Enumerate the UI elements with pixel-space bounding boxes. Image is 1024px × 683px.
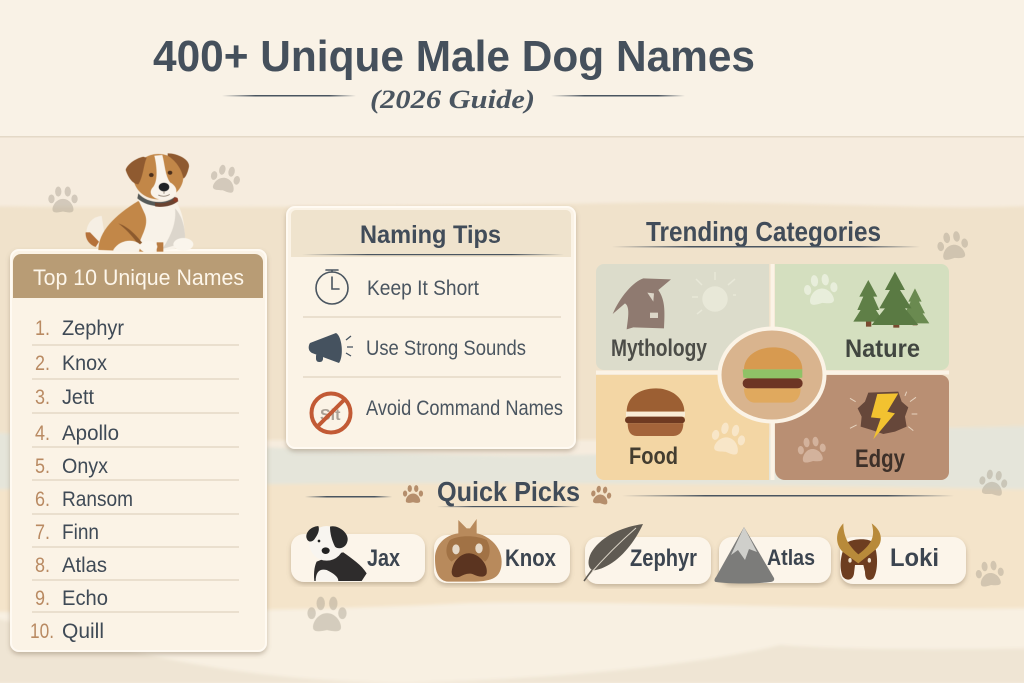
panel: naming tips [287,207,575,448]
category: nature [775,264,949,370]
pick: zephyr: Zephyr [630,545,697,572]
icon: megaphone [309,333,353,363]
icon: brown bull [435,519,502,582]
heading: trending categories: Trending Categories [646,216,881,247]
pick: loki [837,523,966,584]
list: names: Echo [62,587,108,610]
list: names: 8. [35,554,50,577]
category: mythology: Mythology [611,335,708,362]
icon: lightning [850,392,917,439]
category: edgy [775,375,949,480]
pick: loki: Loki [890,544,939,572]
icon: burger [625,388,685,436]
heading: naming tips [291,210,571,257]
center badge [720,328,824,422]
pick: jax [291,526,425,582]
tip: avoid commands: Avoid Command Names [366,397,563,420]
panel: top 10 names [11,250,266,651]
category: food: Food [629,443,678,470]
icon: no sit [312,394,350,432]
icon: horned helmet [837,523,881,580]
list: names: Knox [62,352,107,375]
decorative paws [48,163,1009,631]
list: names: Onyx [62,455,108,478]
icon: mountain [714,527,774,584]
icon: stopwatch [316,270,348,304]
category: food [596,375,769,480]
tip: keep it short [316,270,479,304]
icon: black and white dog [306,526,367,581]
tip: strong sounds: Use Strong Sounds [366,337,526,360]
list: names: Quill [62,620,104,643]
category: mythology [596,264,769,370]
heading: quick picks [305,476,954,507]
pick: atlas [714,527,831,584]
heading: naming tips: Naming Tips [360,221,501,249]
category: edgy: Edgy [855,445,905,473]
list: names: 4. [35,422,50,445]
subtitle: (2026 Guide) [370,85,535,114]
list: names: 10. [30,620,54,643]
icon: feather [584,524,643,581]
list: names: Atlas [62,554,107,577]
icon: trees [853,272,929,328]
list: names: 3. [35,386,50,409]
list: names: 1. [35,317,50,340]
heading: top 10: Top 10 Unique Names [33,265,244,290]
category: nature: Nature [845,335,920,363]
pick: zephyr [584,524,711,584]
header band [0,0,1024,138]
panel: quick picks [291,519,966,584]
tip: keep it short: Keep It Short [367,277,479,300]
list: names: Jett [62,386,94,409]
heading: top 10 [13,254,263,298]
pick: knox: Knox [505,545,557,572]
icon: burger center [743,347,803,403]
pick: atlas: Atlas [767,545,815,570]
list: names: 9. [35,587,50,610]
panel: trending categories [596,264,949,480]
title: 400+ Unique Male Dog Names [153,32,755,81]
list: names: 7. [35,521,50,544]
icon: no sit: Sit [320,407,341,424]
tip: avoid commands [312,394,563,432]
pick: jax: Jax [367,545,401,572]
list: names: 5. [35,455,50,478]
tip: strong sounds [309,333,526,363]
list: names: Apollo [62,422,119,445]
list: names: 2. [35,352,50,375]
heading: quick picks: Quick Picks [437,476,580,507]
icon: puppy [86,153,193,252]
list: names [30,317,133,643]
list: names: Zephyr [62,317,124,340]
list: names: 6. [35,488,50,511]
icon: helmet [613,278,671,329]
pick: knox [434,519,570,583]
list: names: Finn [62,521,99,544]
list: names: Ransom [62,488,133,511]
